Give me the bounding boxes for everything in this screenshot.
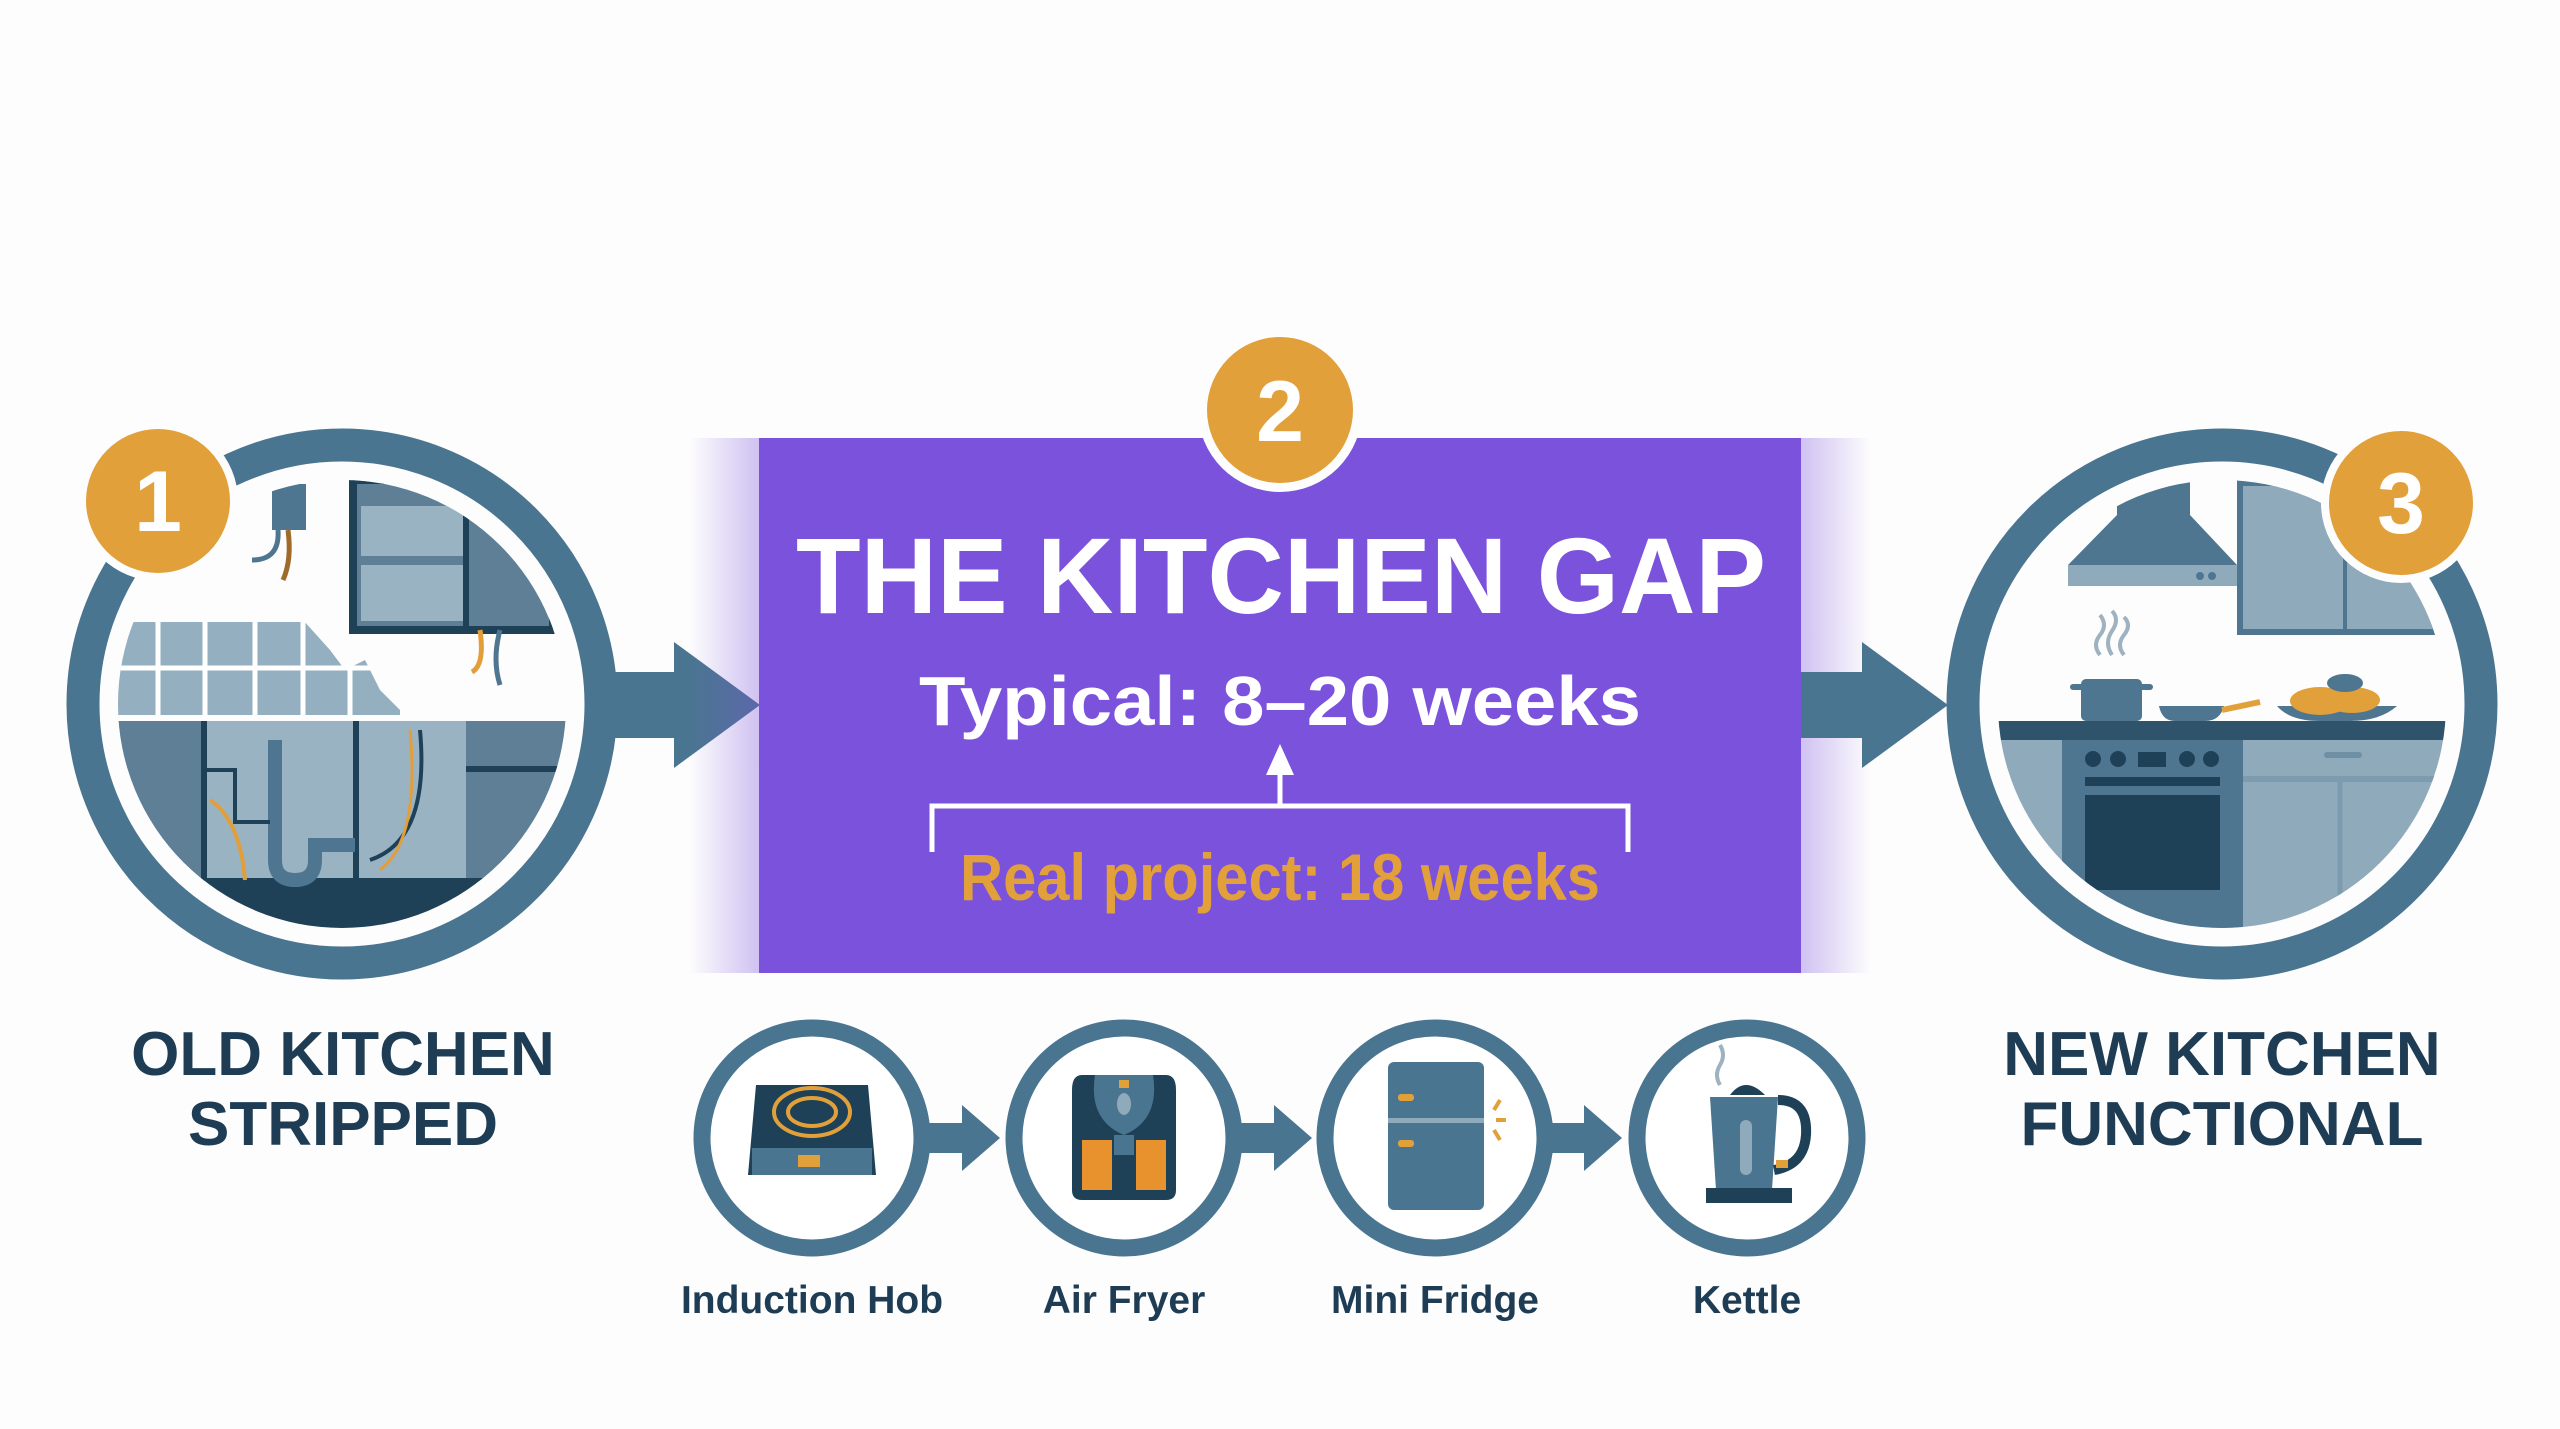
arrow bbox=[1550, 1105, 1622, 1171]
appliance labels bbox=[681, 1279, 1801, 1322]
panel: the kitchen gap bbox=[689, 328, 1871, 973]
label: new kitchen functional: NEW KITCHEN bbox=[2003, 1020, 2441, 1089]
badge 3 bbox=[2321, 423, 2481, 583]
panel: step 1 old kitchen bbox=[78, 421, 601, 963]
arrow up + bracket bbox=[932, 765, 1628, 852]
icon: kettle bbox=[1637, 1028, 1857, 1248]
ring 1 bbox=[83, 445, 601, 963]
title: THE KITCHEN GAP bbox=[796, 515, 1766, 636]
appliance labels: Air Fryer bbox=[1043, 1279, 1205, 1322]
badge 2: 2 bbox=[1256, 364, 1304, 460]
arrow: step1 to step2 bbox=[600, 642, 760, 768]
panel: step 3 new kitchen bbox=[1963, 423, 2481, 963]
ring 3 bbox=[1963, 445, 2481, 963]
arrow bbox=[1240, 1105, 1312, 1171]
scene: functional kitchen bbox=[1990, 480, 2453, 940]
icon: air fryer bbox=[1014, 1028, 1234, 1248]
arrow: step2 to step3 bbox=[1801, 642, 1948, 768]
appliance chain bbox=[702, 1028, 1857, 1248]
appliance labels: Induction Hob bbox=[681, 1279, 943, 1322]
badge 1 bbox=[78, 421, 238, 581]
label: new kitchen functional: FUNCTIONAL bbox=[2021, 1090, 2423, 1159]
label: old kitchen stripped: STRIPPED bbox=[188, 1090, 498, 1159]
real project: Real project: 18 weeks bbox=[960, 840, 1600, 914]
arrow bbox=[928, 1105, 1000, 1171]
badge 1: 1 bbox=[134, 454, 182, 550]
label: old kitchen stripped: OLD KITCHEN bbox=[131, 1020, 555, 1089]
badge 3: 3 bbox=[2377, 456, 2425, 552]
appliance labels: Kettle bbox=[1693, 1279, 1801, 1322]
typical range: Typical: 8–20 weeks bbox=[919, 662, 1641, 740]
icon: induction hob bbox=[702, 1028, 922, 1248]
icon: mini fridge bbox=[1325, 1028, 1545, 1248]
appliance labels: Mini Fridge bbox=[1331, 1279, 1539, 1322]
badge 2 bbox=[1198, 328, 1362, 492]
scene: stripped kitchen bbox=[100, 480, 586, 938]
